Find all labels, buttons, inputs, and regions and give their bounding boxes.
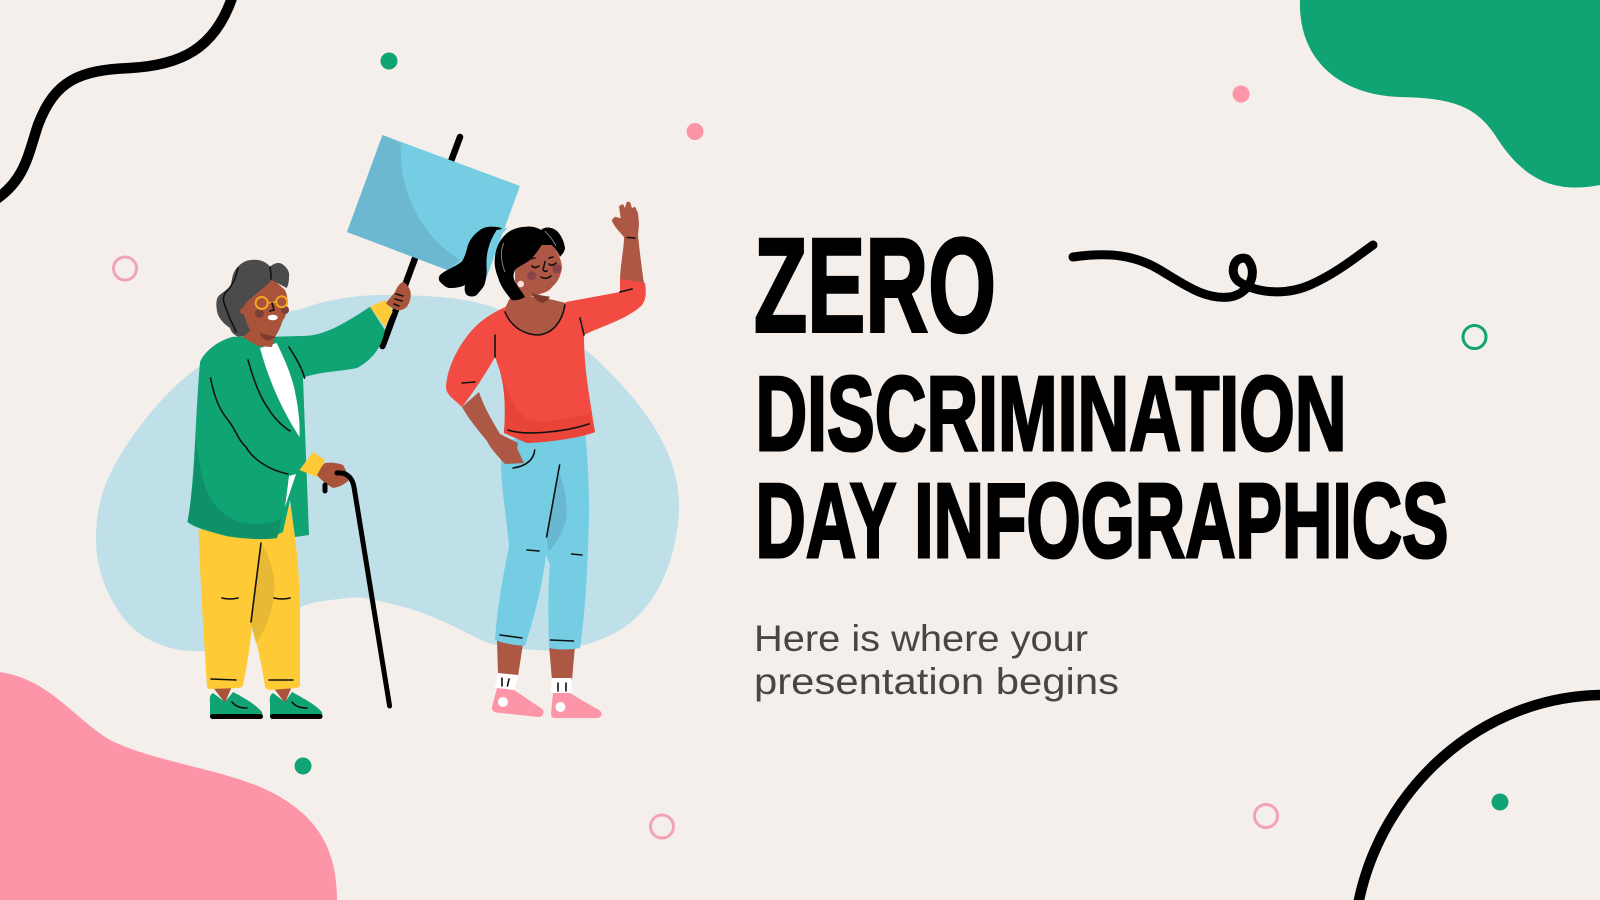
arm on hip <box>462 392 524 464</box>
lower cuff, hand and cane <box>300 452 390 706</box>
subtitle <box>754 618 1119 702</box>
neck <box>505 296 566 335</box>
top-left black curve <box>0 0 233 200</box>
illustration: young woman waving <box>439 202 646 718</box>
head, hair and glasses <box>216 260 289 347</box>
light blue blob behind people <box>96 295 679 651</box>
red sweater <box>446 238 646 443</box>
subtitle line 1: Here is where your <box>754 618 1088 659</box>
raised arm and hand <box>612 202 644 283</box>
illustration: older woman with cane <box>188 260 411 719</box>
green cardigan <box>188 307 385 539</box>
feet and shoes <box>210 686 322 719</box>
decorative dots and rings <box>114 52 1508 838</box>
title <box>754 212 1448 580</box>
head and face <box>495 227 565 303</box>
title line: ZERO: ZERO <box>754 212 996 360</box>
hair tie <box>486 228 508 270</box>
legs, socks and pink shoes <box>492 640 602 718</box>
illustration: protest sign <box>347 135 520 346</box>
top-right green blob <box>1300 0 1600 188</box>
ponytail <box>439 227 502 296</box>
squiggle decoration <box>1073 245 1373 297</box>
subtitle line 2: presentation begins <box>754 661 1119 702</box>
bottom-left pink blob <box>0 672 337 900</box>
bottom-right black arc <box>1358 695 1600 900</box>
raised cuff and hand <box>370 282 411 327</box>
blue jeans <box>495 432 589 650</box>
yellow trousers <box>199 505 300 690</box>
